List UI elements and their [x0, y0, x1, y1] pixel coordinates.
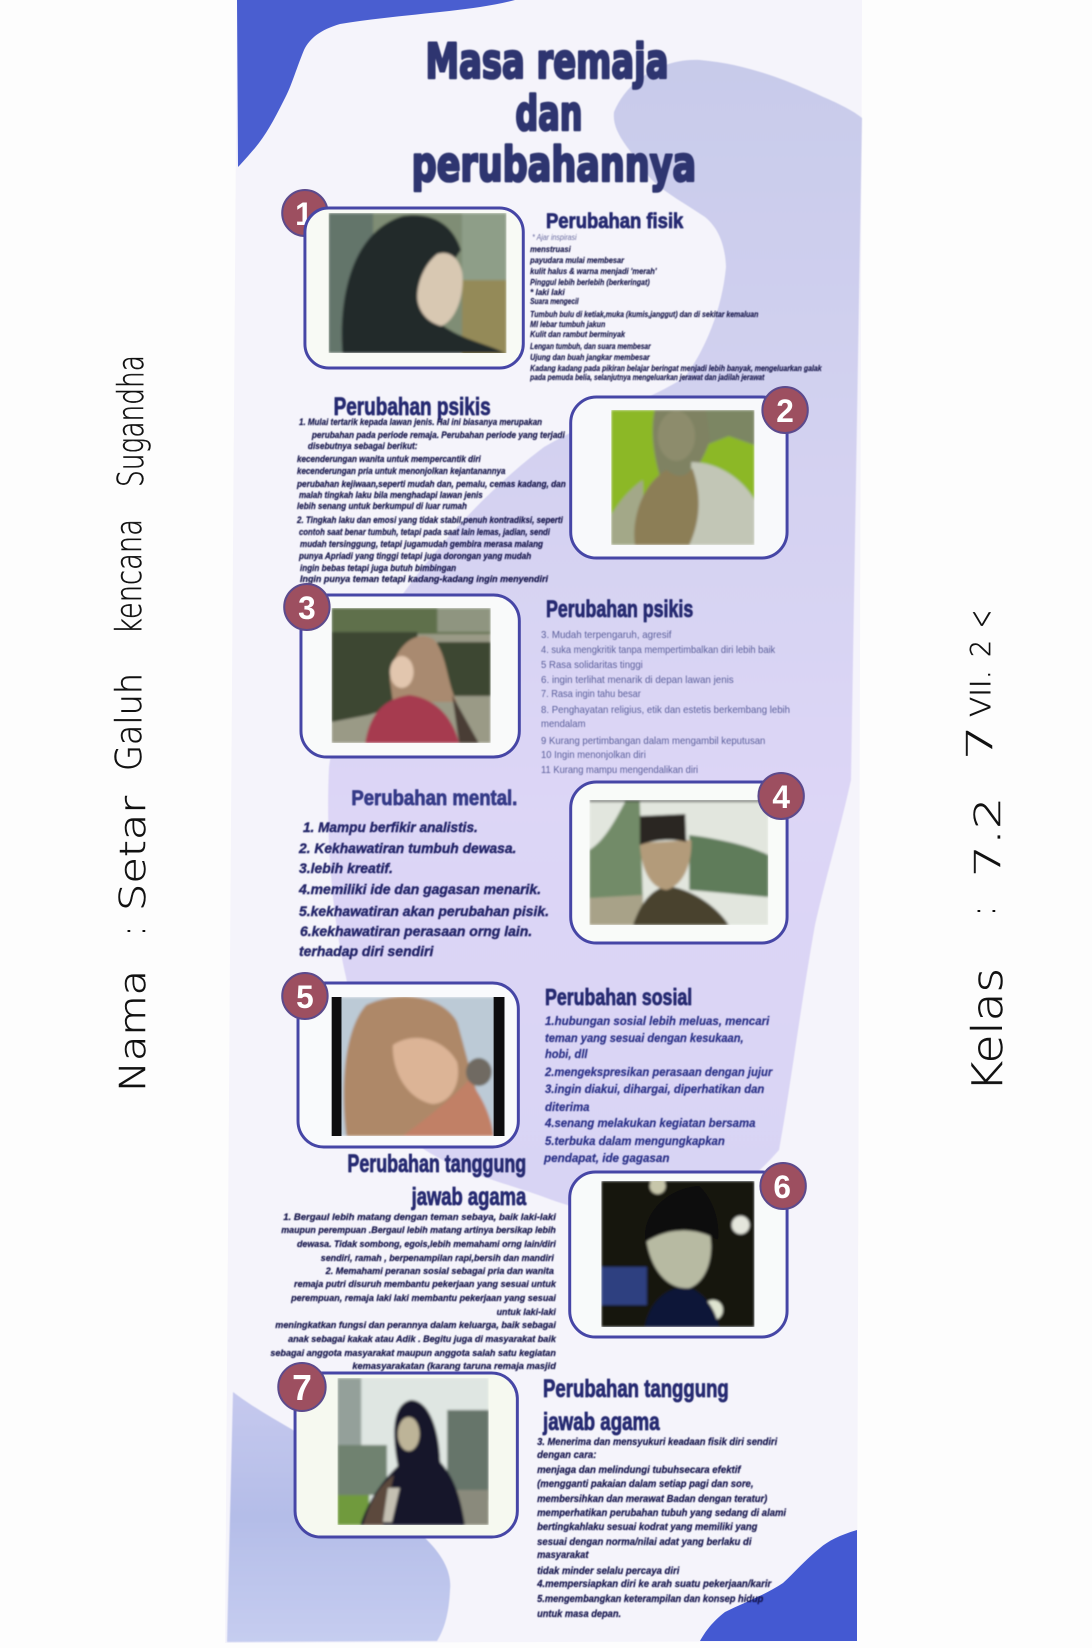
handwritten name, rotated: Nama [113, 970, 154, 1092]
text: perubahan fisik: Tumbuh bulu di ketiak,muka (kumis,janggut) dan di sekitar kemaluan [530, 309, 758, 319]
text: perubahan tanggung jawab agama right: untuk masa depan. [537, 1609, 621, 1620]
handwritten class, rotated: < [961, 610, 1002, 628]
text: perubahan tanggung jawab agama left: untuk laki-laki [497, 1307, 556, 1318]
photo 2: man with hands together [611, 410, 754, 545]
text: perubahan tanggung jawab agama right: masyarakat [537, 1550, 589, 1561]
text: perubahan tanggung jawab agama right: 3. Menerima dan mensyukuri keadaan fisik diri sendiri [537, 1437, 778, 1448]
text: perubahan tanggung jawab agama right: menjaga dan melindungi tubuhsecara efektif [537, 1465, 742, 1476]
badge 1 [282, 190, 328, 236]
text: perubahan mental: terhadap diri sendiri [299, 943, 435, 959]
text: perubahan psikis left: Perubahan psikis [334, 394, 491, 421]
title: Masa remaja [425, 35, 669, 90]
text: perubahan fisik: Pinggul lebih berlebih (berkeringat) [530, 277, 650, 287]
card 4: photo frame with number badge [571, 773, 804, 943]
text: perubahan psikis right: Perubahan psikis [546, 596, 693, 623]
text: perubahan tanggung jawab agama left: perempuan, remaja laki laki membantu pekerjaan yang sesuai [290, 1293, 556, 1304]
text: perubahan mental: 6.kekhawatiran perasaan orng lain. [300, 923, 532, 939]
text: perubahan psikis right: 5 Rasa solidaritas tinggi [541, 660, 643, 671]
text: perubahan fisik: menstruasi [530, 244, 571, 254]
text: perubahan fisik: * Ajar inspirasi [532, 232, 578, 242]
handwritten name, rotated: Setar [113, 796, 154, 911]
text: perubahan sosial: 3.ingin diakui, dihargai, diperhatikan dan [545, 1084, 764, 1096]
photo 3: girl in red top [332, 608, 491, 743]
text: perubahan tanggung jawab agama right: dengan cara: [537, 1450, 596, 1461]
text: perubahan psikis right: 11 Kurang mampu mengendalikan diri [541, 765, 698, 776]
title: dan [515, 87, 583, 142]
badge 4: 4 [772, 779, 790, 815]
text: perubahan sosial: diterima [545, 1102, 590, 1114]
badge 3 [284, 584, 330, 630]
handwritten class, rotated [960, 610, 1012, 1092]
text: perubahan tanggung jawab agama left: Perubahan tanggung [347, 1151, 526, 1178]
text: perubahan psikis left: Ingin punya teman tetapi kadang-kadang ingin menyendiri [300, 574, 548, 585]
text: perubahan tanggung jawab agama left: sendiri, ramah , berpenampilan rapi,bersih dan mandiri [321, 1253, 554, 1264]
handwritten name, rotated: Galuh [109, 673, 150, 771]
text: perubahan psikis left: mudah tersinggung, tetapi jugamudah gembira merasa malang [300, 539, 543, 550]
text: perubahan psikis left: punya Apriadi yang tinggi tetapi juga dorongan yang mudah [298, 551, 531, 562]
handwritten class, rotated: : [963, 906, 1004, 916]
text: perubahan psikis left: lebih senang untuk berkumpul di luar rumah [297, 501, 467, 512]
text: perubahan tanggung jawab agama left: 1. Bergaul lebih matang dengan teman sebaya, baik laki-laki [283, 1212, 556, 1223]
blue blob: top left [237, 0, 515, 167]
photo 1: girl in dark hijab [329, 213, 506, 355]
text: perubahan psikis right: 8. Penghayatan religius, etik dan estetis berkembang lebih [541, 705, 790, 716]
badge 6: 6 [773, 1169, 791, 1205]
text: perubahan psikis left: kecenderungan wanita untuk mempercantik diri [297, 454, 481, 465]
card 6: photo frame with number badge [570, 1163, 806, 1337]
text: perubahan tanggung jawab agama right: 5.mengembangkan keterampilan dan konsep hidup [537, 1594, 764, 1605]
text: perubahan sosial: Perubahan sosial [545, 984, 692, 1010]
text: perubahan psikis right: 3. Mudah terpengaruh, agresif [541, 630, 672, 641]
text: perubahan sosial: teman yang sesuai dengan kesukaan, [545, 1033, 744, 1045]
text: perubahan tanggung jawab agama left [270, 1151, 557, 1372]
text: perubahan tanggung jawab agama right: (mengganti pakaian dalam setiap pagi dan sore, [537, 1479, 753, 1490]
photo 5: girl in tan hijab [332, 997, 505, 1136]
text: perubahan mental: 4.memiliki ide dan gagasan menarik. [298, 881, 541, 897]
text: perubahan tanggung jawab agama left: 2. Memahami peranan sosial sebagai pria dan wanita [325, 1266, 554, 1277]
frame 2 [571, 397, 787, 558]
text: perubahan tanggung jawab agama right: jawab agama [542, 1409, 660, 1436]
text: perubahan psikis left: 2. Tingkah laku dan emosi yang tidak stabil,penuh kontradiksi, seperti [296, 515, 563, 526]
frame 3 [301, 595, 519, 757]
text: perubahan fisik: Kulit dan rambut berminyak [530, 329, 626, 339]
badge 3: 3 [298, 590, 316, 626]
text: perubahan sosial: pendapat, ide gagasan [543, 1153, 670, 1165]
text: perubahan mental: 1. Mampu berfikir analistis. [303, 819, 478, 835]
handwritten name, rotated: kencana [109, 519, 150, 634]
text: perubahan psikis right: 9 Kurang pertimbangan dalam mengambil keputusan [541, 736, 766, 747]
photo 7: girl in black hijab outdoors [338, 1378, 489, 1525]
handwritten name, rotated: Sugandha [111, 355, 152, 487]
text: perubahan fisik: pada pemuda belia, selanjutnya mengeluarkan jerawat dan jadilah jerawat [529, 372, 765, 382]
text: perubahan tanggung jawab agama left: sebagai anggota masyarakat maupun anggota salah satu kegiatan [270, 1348, 556, 1359]
card 3: photo frame with number badge [284, 584, 519, 757]
text: perubahan sosial: hobi, dll [545, 1049, 588, 1061]
text: perubahan fisik [529, 210, 823, 382]
text: perubahan tanggung jawab agama right [536, 1376, 787, 1620]
text: perubahan psikis left: ingin bebas tetapi juga butuh bimbingan [300, 563, 456, 574]
photo 4: boy with black cap [589, 800, 768, 925]
text: perubahan tanggung jawab agama left: meningkatkan fungsi dan perannya dalam keluarga, baik sebagai [275, 1320, 556, 1331]
frame 1 [305, 208, 523, 368]
text: perubahan fisik: kulit halus & warna menjadi 'merah' [530, 266, 658, 276]
title: perubahannya [412, 138, 696, 193]
handwritten class, rotated: VII. [964, 670, 997, 717]
badge 7 [278, 1363, 326, 1411]
lavender blob: bottom left [227, 1392, 450, 1642]
badge 6 [760, 1163, 806, 1209]
text: perubahan mental: Perubahan mental. [351, 787, 517, 810]
text: perubahan sosial: 2.mengekspresikan perasaan dengan jujur [544, 1067, 773, 1079]
badge 7: 7 [292, 1368, 312, 1408]
frame 4 [571, 782, 787, 943]
badge 4 [758, 773, 804, 819]
text: perubahan fisik: Ml lebar tumbuh jakun [530, 319, 605, 329]
text: perubahan psikis right: 6. ingin terlihat menarik di depan lawan jenis [541, 675, 734, 686]
text: perubahan mental: 5.kekhawatiran akan perubahan pisik. [299, 903, 549, 919]
text: perubahan fisik: Lengan tumbuh, dan suara membesar [530, 341, 651, 351]
text: perubahan tanggung jawab agama right: memperhatikan perubahan tubuh yang sedang di alami [537, 1508, 787, 1519]
text: perubahan psikis left [296, 394, 566, 585]
text: perubahan sosial: 4.senang melakukan kegiatan bersama [544, 1118, 756, 1130]
frame 5 [298, 983, 518, 1147]
card 2: photo frame with number badge [571, 387, 808, 558]
text: perubahan fisik: Ujung dan buah jangkar membesar [530, 352, 650, 362]
text: perubahan fisik: payudara mulai membesar [529, 255, 625, 265]
text: perubahan tanggung jawab agama right: bertingkahlaku sesuai kodrat yang memiliki yang [537, 1522, 758, 1533]
text: perubahan tanggung jawab agama right: 4.mempersiapkan diri ke arah suatu pekerjaan/karir [536, 1579, 772, 1590]
card 1: photo frame with number badge [282, 190, 523, 368]
badge 5 [282, 973, 328, 1019]
text: perubahan tanggung jawab agama right: Perubahan tanggung [543, 1376, 729, 1403]
text: perubahan psikis right: mendalam [541, 719, 586, 730]
text: perubahan mental [298, 787, 549, 959]
handwritten class, rotated: 7.2 [968, 797, 1009, 877]
text: perubahan sosial [543, 984, 773, 1165]
badge 1: 1 [295, 196, 313, 232]
text: perubahan psikis left: kecenderungan pria untuk menonjolkan kejantanannya [297, 466, 505, 477]
text: perubahan sosial: 5.terbuka dalam mengungkapkan [545, 1136, 725, 1148]
frame 7 [295, 1373, 517, 1537]
title [412, 35, 696, 193]
text: perubahan sosial: 1.hubungan sosial lebih meluas, mencari [545, 1016, 770, 1028]
blue blob: bottom right [700, 1530, 857, 1641]
frame 6 [570, 1172, 787, 1337]
text: perubahan psikis left: malah tingkah laku bila menghadapi lawan jenis [299, 490, 483, 501]
card 7: photo frame with number badge [278, 1363, 517, 1537]
handwritten name, rotated: : [113, 926, 154, 936]
text: perubahan tanggung jawab agama right: tidak minder selalu percaya diri [537, 1566, 680, 1577]
text: perubahan tanggung jawab agama left: anak sebagai kakak atau Adik . Begitu juga di masyarakat baik [288, 1334, 557, 1345]
text: perubahan tanggung jawab agama left: jawab agama [411, 1184, 526, 1211]
text: perubahan fisik: Perubahan fisik [546, 210, 684, 233]
text: perubahan mental: 2. Kekhawatiran tumbuh dewasa. [298, 840, 516, 856]
text: perubahan tanggung jawab agama left: dewasa. Tidak sombong, egois,lebih memahami orng lain/diri [297, 1239, 556, 1250]
text: perubahan psikis left: disebutnya sebagai berikut: [308, 441, 418, 452]
text: perubahan psikis left: contoh saat benar tumbuh, tetapi pada saat lain lemas, jadian, sendi [299, 527, 550, 538]
text: perubahan tanggung jawab agama right: sesuai dengan norma/nilai adat yang berlaku di [537, 1537, 753, 1548]
handwritten class, rotated: Kelas [963, 968, 1012, 1092]
text: perubahan psikis right: 10 Ingin menonjolkan diri [541, 750, 646, 761]
handwritten class, rotated: 2 [964, 640, 997, 657]
text: perubahan mental: 3.lebih kreatif. [299, 860, 393, 876]
handwritten class, rotated: 7 [960, 725, 1001, 760]
text: perubahan psikis left: perubahan pada periode remaja. Perubahan periode yang terjadi [311, 430, 565, 441]
text: perubahan fisik: Kadang kadang pada pikiran belajar beringat menjadi lebih banyak, mengeluarkan galak [530, 363, 823, 373]
badge 5: 5 [296, 979, 314, 1015]
badge 2: 2 [776, 393, 794, 429]
poster content [270, 35, 823, 1620]
photo 6: boy at night with black cap [601, 1178, 754, 1327]
text: perubahan tanggung jawab agama right: membersihkan dan merawat Badan dengan teratur) [537, 1494, 768, 1505]
text: perubahan psikis right: 7. Rasa ingin tahu besar [541, 689, 641, 700]
handwritten name, rotated [109, 355, 154, 1092]
badge 2 [762, 387, 808, 433]
card 5: photo frame with number badge [282, 973, 518, 1147]
text: perubahan psikis left: perubahan kejiwaan,seperti mudah dan, pemalu, cemas kadang, dan [296, 479, 566, 490]
text: perubahan psikis right [541, 596, 790, 776]
text: perubahan fisik: * laki laki [530, 287, 565, 297]
text: perubahan tanggung jawab agama left: maupun perempuan .Bergaul lebih matang artinya bersikap lebih [281, 1225, 556, 1236]
text: perubahan psikis right: 4. suka mengkritik tanpa mempertimbalkan diri lebih baik [541, 645, 776, 656]
text: perubahan fisik: Suara mengecil [530, 296, 579, 306]
text: perubahan tanggung jawab agama left: remaja putri disuruh membantu pekerjaan yang sesuai untuk [294, 1279, 557, 1290]
lavender blob: main [328, 60, 862, 1218]
poster background [225, 0, 862, 1643]
text: perubahan tanggung jawab agama left: kemasyarakatan (karang taruna remaja masjid [352, 1361, 556, 1372]
text: perubahan psikis left: 1. Mulai tertarik kepada lawan jenis. Hal ini biasanya merupakan [299, 417, 542, 428]
